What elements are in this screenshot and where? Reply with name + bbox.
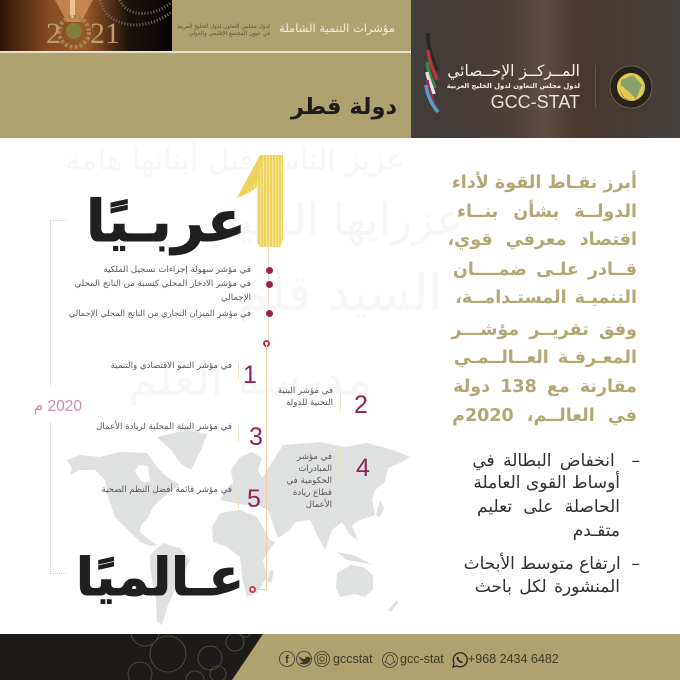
header lower band [0,53,411,138]
rank 5 text: في مؤشر قائمة أفضل النظم الصحية [101,485,232,495]
rank 4 text: الأعمال [306,500,332,510]
logo GCC-STAT: GCC-STAT [491,92,580,112]
rank 4 number: 4 [356,454,370,482]
header title band [172,0,411,51]
handle gccstat: gccstat [333,652,373,666]
bullet 1 [266,267,273,274]
bullet list: – ارتفاع متوسط الأبحاث [464,554,640,574]
main paragraph [448,170,637,426]
number one brush graphic [237,155,283,247]
main paragraph: في العالــم، 2020م [452,406,637,426]
connector to arab list [268,246,269,342]
timeline horizontal line [256,589,267,590]
bullet list: متقـدم [573,521,620,541]
main paragraph: أبرز نقـاط القوة لأداء [452,173,637,193]
logo ribbon [424,33,440,114]
rank 4 text [286,452,332,510]
main paragraph: مقارنة مع 138 دولة [453,377,637,397]
header small caption: لدول مجلس التعاون لدول الخليج العربية [177,24,270,30]
heading: Arab ranking: عربـيًا [86,189,246,255]
arab item 3: في مؤشر الميزان التجاري من الناتج المحلي الإجمالي [69,308,251,318]
rank 1 text: في مؤشر النمو الاقتصادي والتنمية [111,361,232,371]
rank 3 number: 3 [249,423,263,451]
rank 4 divider [340,448,341,473]
GCC-STAT logo panel [411,0,680,138]
header small caption: في عيون المجتمع الإقليمي والدولي [189,30,270,36]
rank 3 divider [238,425,239,442]
rank 4 text: قطاع ريادة [293,488,332,498]
heading: world ranking: عـالميًا [76,548,244,608]
bullet list [464,451,640,597]
bullet list: الحاصلة على تعليم [477,497,620,517]
arab item 2 continued: الإجمالي [221,293,251,303]
logo Arabic subtitle: لدول مجلس التعاون لدول الخليج العربية [447,82,580,90]
snapchat icon [382,652,398,668]
rank 4 text: الحكومية في [286,476,332,486]
bullet list: – انخفاض البطالة في [472,451,640,471]
bullet 3 [266,310,273,317]
rank 2 divider [340,393,341,411]
social icons: f [285,654,289,666]
background calligraphy: مدرسة العلم [128,352,372,406]
main paragraph: الدولــة بشأن بنــاء [457,202,637,222]
main paragraph: اقتصاد معرفي قوي، [448,230,637,250]
background calligraphy: عزرايها السيد [217,195,463,246]
arab item 2: في مؤشر الادخار المحلي كنسبة من الناتج المحلي [74,279,251,289]
arab item 1: في مؤشر سهولة إجراءات تسجيل الملكية [103,265,251,275]
main paragraph: المعـرفـة العــالــمـي [454,348,637,368]
main paragraph: قــادر علـى ضمــــان [453,260,637,280]
header left photo: 2021: 2 [46,17,61,50]
timeline ring bottom [249,586,256,593]
year label: 2020 م [35,398,82,415]
bullet list: أوساط القوى العاملة [473,473,620,493]
footer bar [0,634,680,680]
rank 4 text: في مؤشر [297,452,332,462]
main paragraph: التنميـة المستـدامــة، [455,288,637,308]
rank 1 number: 1 [243,361,257,389]
background calligraphy: عزيز الناس قبل أبنائها هامة [65,139,405,178]
phone number: +968 2434 6482 [468,652,559,666]
rank 5 divider [238,490,239,508]
background calligraphy: السيد قلم [238,264,442,322]
year bracket upper [50,220,66,386]
logo Arabic name: المــركــز الإحــصائي [447,62,580,80]
rank 2 number: 2 [354,391,368,419]
rank 5 number: 5 [247,485,261,513]
rank 2 text: في مؤشر البنية [278,386,333,396]
footer dark corner [0,634,263,680]
whatsapp icon [452,652,468,668]
bullet 2 [266,281,273,288]
timeline vertical line [266,345,267,589]
rank 1 divider [238,363,239,380]
logo divider [595,65,596,107]
country title: دولة قطر [291,94,397,120]
header white separator [0,51,410,53]
header left photo: 2021: 21 [90,17,120,50]
social icons [279,651,330,667]
rank 2 text [278,386,333,408]
timeline ring top [263,340,270,347]
GCC emblem [610,66,652,108]
year bracket lower [50,423,66,574]
rank 2 text: التحتية للدولة [286,398,333,408]
bullet list: المنشورة لكل باحث [475,577,620,597]
rank 4 text: المبادرات [298,464,332,474]
rank 3 text: في مؤشر البيئة المحلية لريادة الأعمال [96,422,232,432]
header small caption [177,24,270,36]
handle gcc-stat: gcc-stat [400,652,444,666]
main paragraph: وفق تقريــر مؤشـــر [451,320,637,340]
header left photo: 2021 [0,0,172,51]
header subtitle: indicators: مؤشرات التنمية الشاملة [279,21,395,35]
